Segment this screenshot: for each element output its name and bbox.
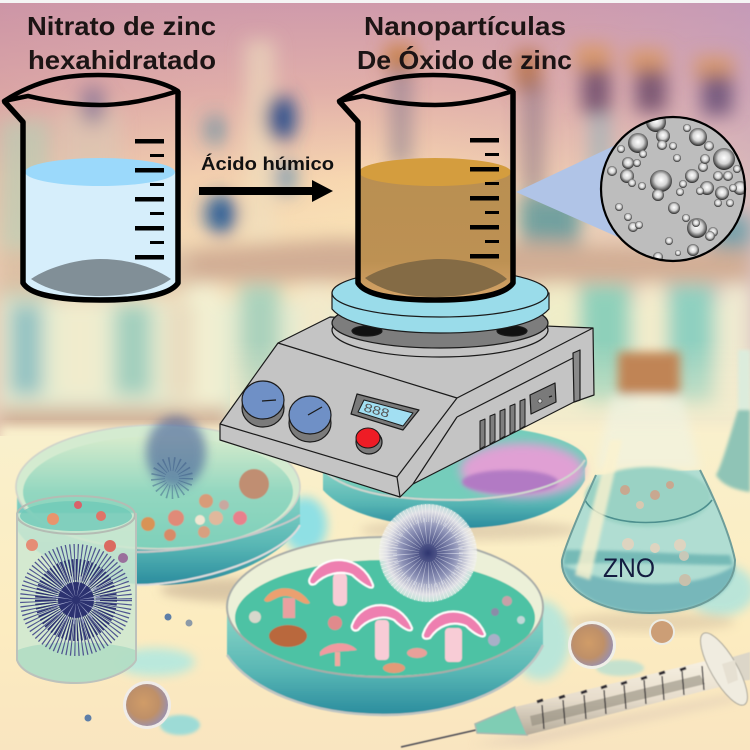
red button [356, 428, 382, 454]
knob 2 [289, 396, 331, 442]
beaker 2: zinc oxide nanoparticles [339, 75, 513, 300]
label: ZNO: ZNO [603, 553, 655, 583]
magnified nanoparticles [601, 112, 747, 262]
digital display [351, 394, 419, 430]
liquid [359, 158, 511, 300]
petri dish: front with mushrooms [227, 537, 570, 715]
small tan sphere, lower left [123, 681, 200, 735]
partial flask at right edge [716, 350, 750, 492]
label: humic acid: Ácido húmico [201, 153, 334, 174]
glass with spiky nanoparticle [17, 496, 195, 722]
petri dish: back left [16, 425, 327, 602]
title: zinc oxide nanoparticles: De Óxido de zinc [357, 45, 572, 75]
blurred urchin behind the hot plate [146, 416, 206, 492]
mushroom: left pink [309, 560, 373, 606]
spiky sphere over front dish [379, 504, 477, 602]
stirring plate [332, 269, 549, 357]
title: zinc oxide nanoparticles: Nanopartículas [364, 11, 566, 41]
hot plate stirrer [220, 269, 594, 497]
magnification cone [516, 143, 620, 238]
small tan spheres, lower right [568, 619, 675, 676]
table surface [0, 426, 750, 750]
flask neck and cork [596, 352, 700, 470]
beaker outline [339, 75, 513, 300]
knob 1 [242, 381, 284, 427]
body [220, 317, 594, 497]
title: zinc nitrate: hexahidratado [28, 45, 216, 75]
mushroom: tan [264, 588, 310, 618]
beaker 1: zinc nitrate solution [4, 75, 178, 300]
icon: spiky sphere [38, 562, 114, 638]
top white strip [0, 0, 750, 3]
arrow with label [199, 153, 334, 202]
measuring marks [470, 138, 499, 258]
liquid [25, 158, 176, 300]
title: zinc nitrate: Nitrato de zinc [27, 11, 216, 41]
measuring marks [135, 139, 164, 260]
background: blurred laboratory shelf [0, 3, 750, 443]
arrow [199, 180, 333, 202]
syringe [401, 627, 750, 747]
mushroom: center pink [352, 605, 412, 660]
mushroom: right pink [423, 612, 485, 662]
petri dish: back right with pink urchin [323, 425, 587, 540]
beaker outline [4, 75, 178, 300]
flask labelled ZNO [562, 352, 750, 632]
title: zinc nitrate [27, 11, 216, 75]
vent slots [480, 399, 525, 449]
title: zinc oxide nanoparticles [357, 11, 572, 75]
digital display: 888 [362, 400, 391, 421]
power switch [530, 383, 556, 414]
